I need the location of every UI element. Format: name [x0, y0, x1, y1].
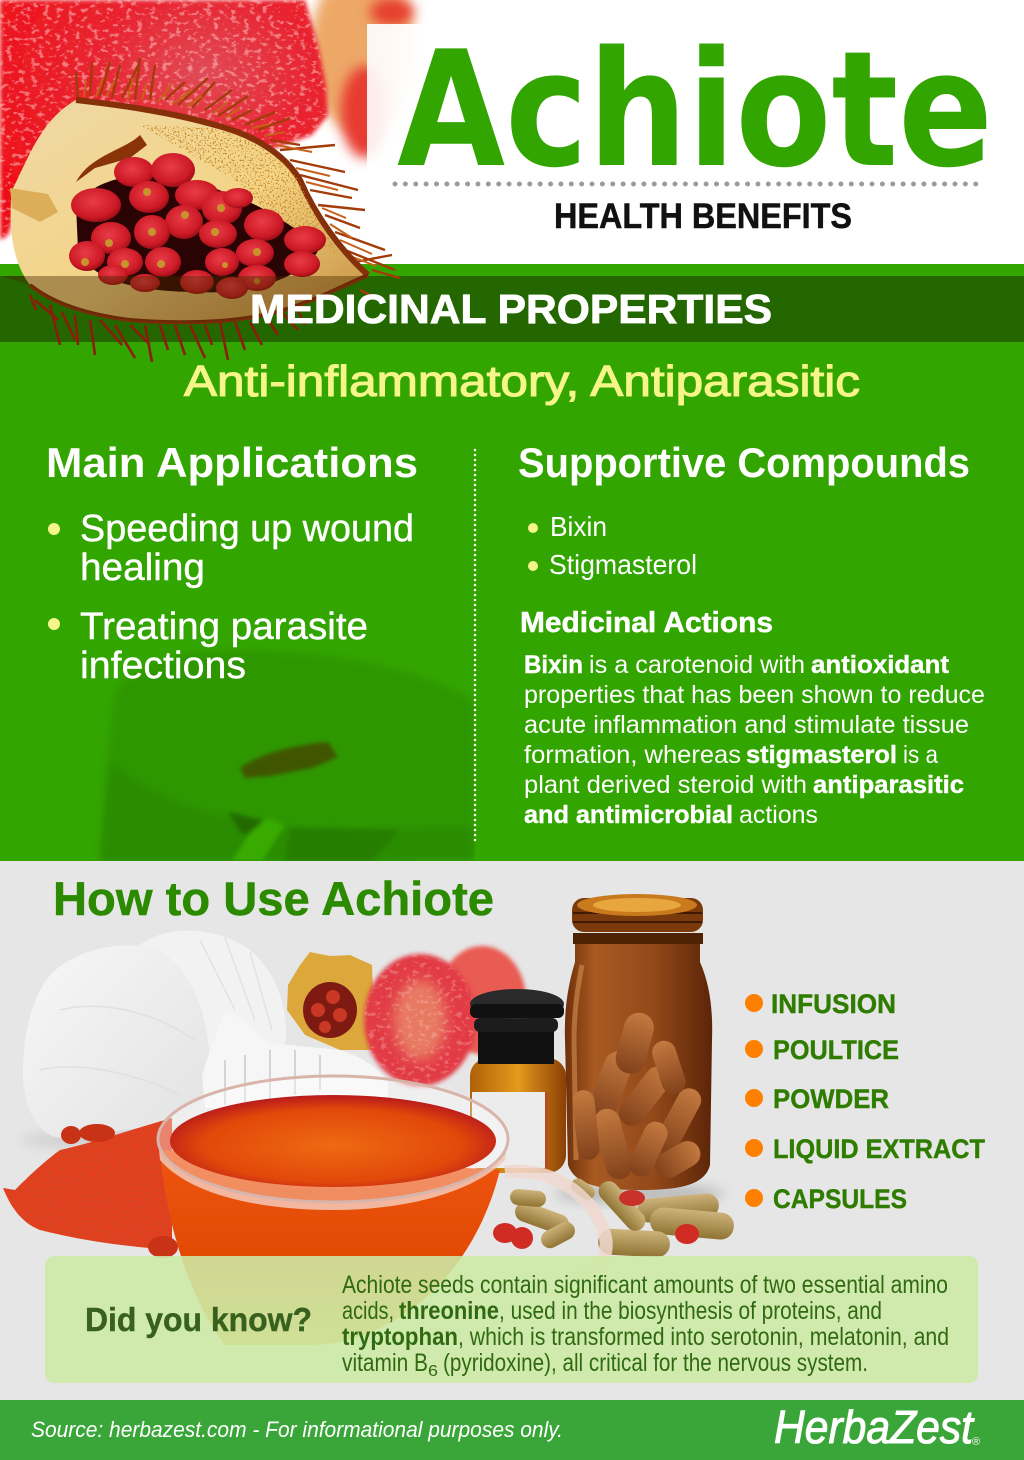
pod rough edge — [76, 100, 368, 275]
text: medicinal actions description: plant derived steroid with — [524, 771, 807, 799]
achiote seeds — [61, 1124, 178, 1258]
text: did you know description: , which is transformed into serotonin, melatonin, and — [458, 1323, 949, 1351]
text: did you know description: , used in the biosynthesis of proteins, and — [499, 1297, 882, 1325]
text: medicinal actions description: actions — [739, 801, 818, 829]
text: medicinal actions description: antiparasitic — [813, 771, 964, 799]
text: medicinal actions description: is a — [903, 741, 938, 769]
bullet: stigmasterol: Stigmasterol — [549, 549, 697, 580]
bullet: wound healing: Speeding up wound — [80, 508, 414, 550]
bullet: wound healing: healing — [80, 547, 205, 589]
heading: how to use achiote: How to Use Achiote — [53, 872, 494, 925]
photo: poultice pouch — [20, 931, 388, 1150]
item: liquid extract: LIQUID EXTRACT — [773, 1134, 985, 1164]
heading: did you know: Did you know? — [85, 1301, 312, 1338]
text: did you know description: (pyridoxine), all critical for the nervous system. — [443, 1349, 868, 1377]
bullet: parasite infections — [48, 606, 368, 687]
text: medicinal actions description: antioxidant — [811, 651, 950, 679]
shadow where pod crosses band — [0, 275, 380, 322]
text: medicinal actions description: properties that has been shown to reduce — [524, 681, 985, 709]
bullet: bixin: Bixin — [550, 511, 607, 542]
text: medicinal actions description: acute inflammation and stimulate tissue — [524, 711, 969, 739]
pod inner dark hollow — [76, 175, 320, 292]
footer: ® — [972, 1436, 980, 1448]
pod shell — [11, 100, 368, 322]
panel: main applications — [46, 439, 418, 687]
photo: achiote fruits — [287, 946, 526, 1086]
logo: herbazest: HerbaZest — [774, 1401, 975, 1453]
item: poultice: POULTICE — [773, 1035, 899, 1065]
photo: capsules on surface — [493, 1176, 735, 1258]
panel: did you know — [45, 1256, 978, 1383]
text: medicinal actions description — [524, 651, 985, 829]
dark fin — [76, 135, 147, 182]
photo: large capsule bottle — [555, 894, 725, 1204]
panel: supportive compounds — [518, 439, 985, 829]
text: did you know description — [342, 1271, 949, 1380]
heading: medicinal actions: Medicinal Actions — [520, 607, 773, 639]
bullet: parasite infections: Treating parasite — [80, 606, 368, 648]
text: did you know description: threonine — [399, 1297, 499, 1325]
item: powder: POWDER — [773, 1084, 889, 1114]
list: forms of use — [745, 989, 985, 1214]
bullet: wound healing — [48, 508, 414, 589]
source note: Source: herbazest.com - For informational purposes only. — [31, 1417, 563, 1442]
text: medicinal actions description: stigmasterol — [746, 741, 897, 769]
arm photo with bruise — [100, 650, 475, 861]
panel: how to use background — [0, 861, 1024, 1400]
item: capsules: CAPSULES — [773, 1184, 907, 1214]
photo: cup of achiote tea — [158, 1076, 606, 1345]
label — [472, 1092, 546, 1168]
pod stem — [10, 188, 58, 222]
bullet: parasite infections: infections — [80, 645, 246, 687]
heading: medicinal properties: MEDICINAL PROPERTIES — [250, 286, 772, 332]
text: medicinal actions description: and antimicrobial — [524, 801, 733, 829]
seeds — [69, 153, 326, 299]
seeds among capsules — [619, 1190, 645, 1206]
text: did you know description: vitamin B — [342, 1349, 428, 1377]
text: did you know description: acids, — [342, 1297, 394, 1325]
dotted divider under title — [395, 182, 986, 186]
heading: main applications: Main Applications — [46, 439, 418, 486]
photo: red achiote fruit background — [0, 0, 414, 240]
subtitle: HEALTH BENEFITS — [554, 197, 852, 236]
capsules inside — [571, 1009, 705, 1183]
item: infusion: INFUSION — [771, 989, 896, 1019]
flesh speckle — [140, 125, 340, 255]
green medicinal section — [0, 264, 1024, 861]
text: medicinal actions description: Bixin — [524, 651, 583, 679]
dark heading band — [0, 276, 1024, 342]
photo: powder pile — [3, 1118, 178, 1258]
text: medicinal actions description: is a carotenoid with — [589, 651, 805, 679]
seed eyes — [81, 188, 261, 284]
photo: open achiote pod — [0, 58, 400, 362]
pod spikes — [76, 58, 400, 300]
heading: supportive compounds: Supportive Compounds — [518, 439, 970, 486]
properties line: Anti-inflammatory, Antiparasitic — [184, 357, 860, 406]
title panel — [367, 24, 1024, 246]
photo: small amber bottle — [470, 989, 566, 1173]
text: medicinal actions description: formation, whereas — [524, 741, 741, 769]
text: did you know description: tryptophan — [342, 1323, 458, 1351]
text: did you know description: 6 — [428, 1363, 438, 1380]
footer — [0, 1400, 1024, 1460]
bullet: bixin — [528, 511, 607, 542]
